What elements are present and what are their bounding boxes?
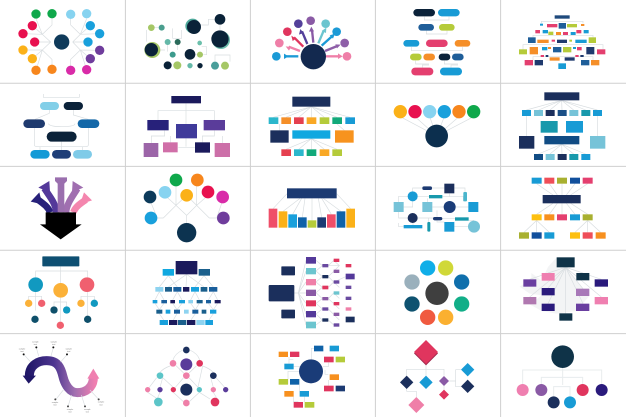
panel: central circle with paired boxes [279,346,345,408]
panel: tree of coloured circles [144,174,230,242]
outer circle nodes [272,16,351,61]
panel: pill flowchart with connectors [23,94,99,159]
column of leaf boxes [306,257,355,328]
boxes [144,96,230,157]
hub circle [301,44,326,69]
root circle [551,345,574,368]
sample labels: text [34,343,37,346]
panel: radiating flowchart with long shadows [520,257,608,321]
boxes [523,257,608,321]
panel: horizontal tree of boxes [269,257,355,328]
top circles [394,105,480,118]
sample labels: text [67,350,71,353]
boxes [153,261,221,325]
panel: pill flowchart [403,9,470,75]
sample labels: sample [32,341,39,343]
sample labels: text [53,404,57,407]
circle nodes [145,347,228,406]
network shapes [394,184,480,233]
panel: multicolour hierarchy boxes [269,97,355,156]
sample labels: text [68,411,72,414]
panel: black arrow with five purple arrows [31,177,92,239]
central node [54,34,69,50]
sample labels [19,341,105,414]
pills [23,102,99,159]
sample labels: sample [52,402,59,404]
boxes [279,346,345,408]
sample labels: text [52,343,56,346]
panel: three tier coloured boxes [519,178,606,239]
panel: mixed shape network [394,184,480,233]
root and branch boxes [269,266,295,318]
child circles [517,384,608,408]
bubble nodes [144,14,230,70]
sample labels: text [99,403,103,406]
pills [403,9,470,75]
diamonds [400,340,474,413]
sample labels: sample [19,348,26,350]
centre circle [425,282,449,305]
S curve arrow [23,361,99,393]
sample labels: sample [67,409,74,411]
label dots and stems [23,346,100,407]
long shadows [520,257,589,314]
circle nodes [25,277,98,329]
panel: ring of circles around grey centre [404,260,469,325]
panel: radial circle flowchart [18,9,104,75]
black arrow [40,212,82,239]
sample labels: text [86,411,89,414]
sample labels: sample [98,402,105,404]
circle nodes [144,174,230,224]
sample labels: sample [65,348,73,350]
panel: dense rectangle flowchart [519,15,605,69]
central circle [299,359,323,383]
panel: bar chart with header box [269,188,355,228]
bars [269,209,355,228]
header box [42,256,79,266]
left and right circle nodes [18,9,104,75]
panel: organisation chart of purple boxes [144,96,230,157]
boxes [519,178,606,239]
header box [287,188,337,198]
panel: blue hierarchy boxes [519,92,605,160]
panel: circles converging on one node [394,105,480,147]
boxes [269,97,355,156]
panel: circle tree under header [25,256,98,329]
panel: circle tree with thick connectors [517,345,608,408]
panel: S shaped arrow timeline [19,341,105,414]
arrows [284,27,343,59]
ring circles [404,260,469,325]
boxes [519,92,605,160]
sample labels: sample [50,341,58,343]
sample labels: text [20,350,24,353]
purple arrows [31,177,92,212]
sample labels: sample [84,409,91,411]
large node [425,125,448,147]
panel: scattered bubble flowchart [144,14,230,70]
panel: fan of arrows from semicircle hub [272,16,351,69]
panel: triangular circle network [145,347,228,406]
panel: diamond decision tree [400,340,474,413]
rectangles [519,15,605,69]
panel: rows of blue boxes [153,261,221,325]
base node [177,223,196,242]
